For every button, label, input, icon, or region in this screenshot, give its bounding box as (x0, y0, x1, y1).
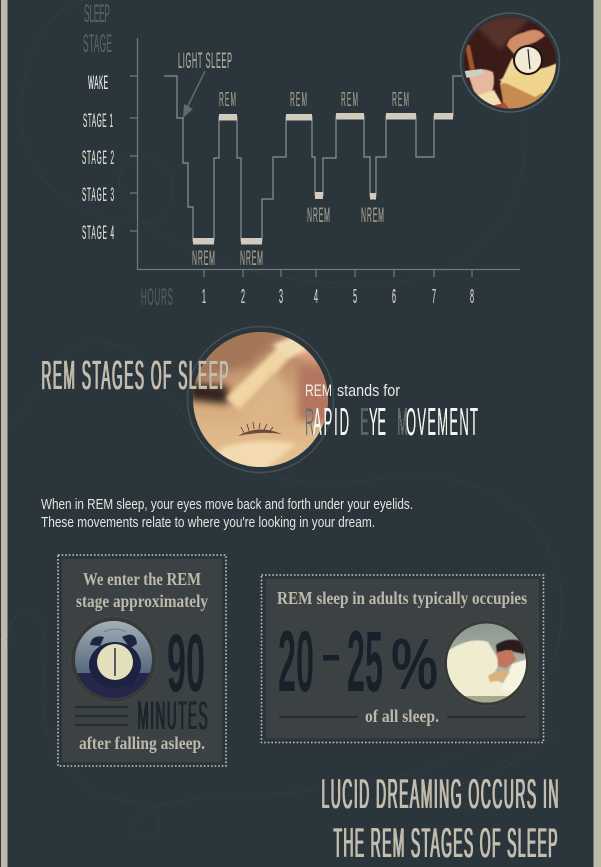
heading: rapid eye movement (305, 401, 478, 444)
panel: 90 minutes: 90 (167, 618, 205, 709)
big number 20-25% (278, 614, 438, 710)
y-axis stage labels (82, 73, 114, 244)
big number 20-25%: 20 (278, 614, 314, 710)
y-axis title: sleep stage: STAGE (83, 29, 112, 57)
decorative lines beside minutes (75, 707, 128, 725)
side border right (594, 0, 601, 867)
hours axis numbers: 4 (314, 286, 318, 308)
light sleep callout (178, 49, 232, 118)
hours axis numbers: 1 (202, 286, 206, 308)
NREM labels: NREM (361, 205, 384, 227)
heading: rapid eye movement: M (397, 401, 408, 444)
REM stands for: REM (305, 381, 332, 400)
panel text: of all sleep: of all sleep. (365, 706, 439, 726)
heading: rapid eye movement: E (360, 401, 369, 444)
NREM labels: NREM (307, 205, 330, 227)
REM labels: REM (341, 90, 358, 111)
chart axes (130, 38, 520, 277)
deep and REM stage bars (193, 113, 453, 244)
REM labels: REM (290, 90, 307, 111)
hours axis numbers: 6 (392, 286, 396, 308)
hours axis numbers: 5 (353, 286, 357, 308)
light sleep callout: LIGHT SLEEP (178, 49, 232, 73)
REM labels: REM (219, 90, 236, 111)
panel text: we enter the REM stage: We enter the REM (83, 569, 201, 589)
heading: rapid eye movement: OVEMENT (406, 401, 478, 444)
heading: rapid eye movement: APID (313, 401, 349, 444)
panel: 90 minutes (58, 555, 226, 766)
hours axis numbers: 8 (470, 286, 474, 308)
REM stands for: stands for (337, 381, 400, 400)
heading: rapid eye movement: YE (369, 401, 386, 444)
side border left (1, 0, 8, 867)
y-axis title: sleep stage (83, 0, 112, 57)
NREM labels: NREM (192, 248, 215, 270)
NREM labels: NREM (240, 248, 263, 270)
panel text: we enter the REM stage (76, 569, 208, 611)
y-axis stage labels: WAKE (88, 73, 108, 94)
y-axis stage labels: STAGE 2 (82, 148, 114, 169)
heading: lucid dreaming: THE REM STAGES OF SLEEP (333, 819, 557, 866)
heading: REM stages of sleep: REM STAGES OF SLEEP (41, 353, 228, 398)
NREM labels (192, 205, 384, 270)
body text (41, 496, 413, 531)
y-axis stage labels: STAGE 1 (83, 111, 113, 132)
photo: closed eye (185, 325, 335, 472)
heading: lucid dreaming (321, 770, 558, 866)
y-axis stage labels: STAGE 4 (82, 223, 114, 244)
panel text: we enter the REM stage: stage approximately (76, 591, 208, 611)
y-axis title: sleep stage: SLEEP (84, 0, 110, 27)
panel: 20-25 percent (262, 575, 544, 742)
hours axis title: HOURS (141, 284, 173, 310)
sleep stage chart (82, 0, 520, 310)
heading: lucid dreaming: LUCID DREAMING OCCURS IN (321, 770, 558, 817)
heading: rapid eye movement: R (305, 401, 314, 444)
REM labels: REM (392, 90, 409, 111)
hours axis numbers: 3 (279, 286, 283, 308)
hypnogram step line (164, 76, 470, 241)
minutes label: MINUTES (137, 694, 207, 738)
photo: alarm clock (70, 616, 160, 703)
photo: man reaching for alarm clock (460, 12, 560, 115)
hours axis numbers: 7 (432, 286, 436, 308)
hours axis numbers (202, 286, 474, 308)
y-axis stage labels: STAGE 3 (82, 185, 114, 206)
REM labels (219, 90, 409, 111)
panel text: REM sleep in adults: REM sleep in adults typically occupies (277, 588, 527, 608)
big number 20-25%: 25 (347, 614, 383, 710)
hours axis numbers: 2 (241, 286, 245, 308)
panel text: after falling asleep: after falling asleep. (79, 733, 205, 753)
photo: sleeping woman (444, 620, 530, 708)
body text: When in REM sleep, your eyes move back and forth under your eyelids. (41, 496, 413, 513)
body text: These movements relate to where you're looking in your dream. (41, 514, 375, 531)
REM stands for (305, 381, 400, 400)
rule lines around caption (279, 716, 526, 718)
big number 20-25%: % (391, 625, 438, 705)
